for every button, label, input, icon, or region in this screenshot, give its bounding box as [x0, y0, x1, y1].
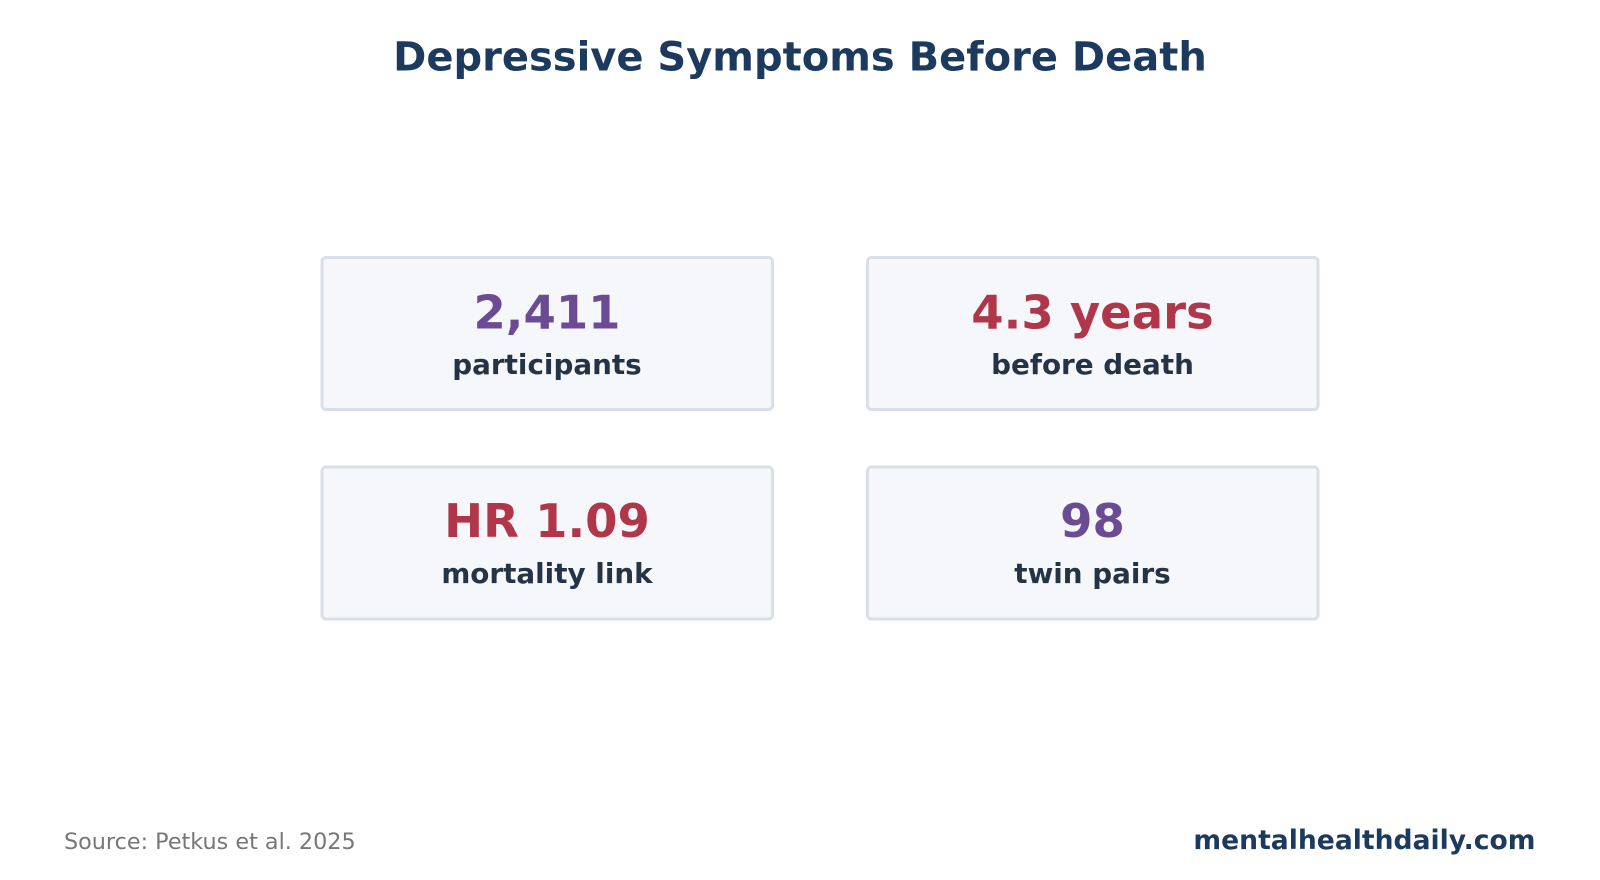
stat: 2,411: 2,411 — [473, 286, 621, 340]
panel: mortality link — [322, 467, 772, 619]
stat: HR 1.09: HR 1.09 — [444, 494, 650, 548]
label: mortality link: mortality link — [441, 557, 654, 590]
label: before death: before death — [991, 348, 1194, 381]
stat: 4.3 years: 4.3 years — [971, 286, 1214, 340]
label: participants: participants — [452, 348, 642, 381]
panel: twin pairs — [868, 467, 1318, 619]
panel: before death — [868, 258, 1318, 410]
website credit: mentalhealthdaily.com — [1193, 825, 1536, 856]
title: Depressive Symptoms Before Death — [393, 34, 1207, 80]
label: twin pairs: twin pairs — [1014, 557, 1171, 590]
stat: 98: 98 — [1060, 494, 1125, 548]
panel: participants — [322, 258, 772, 410]
source note: Source: Petkus et al. 2025 — [64, 829, 356, 855]
